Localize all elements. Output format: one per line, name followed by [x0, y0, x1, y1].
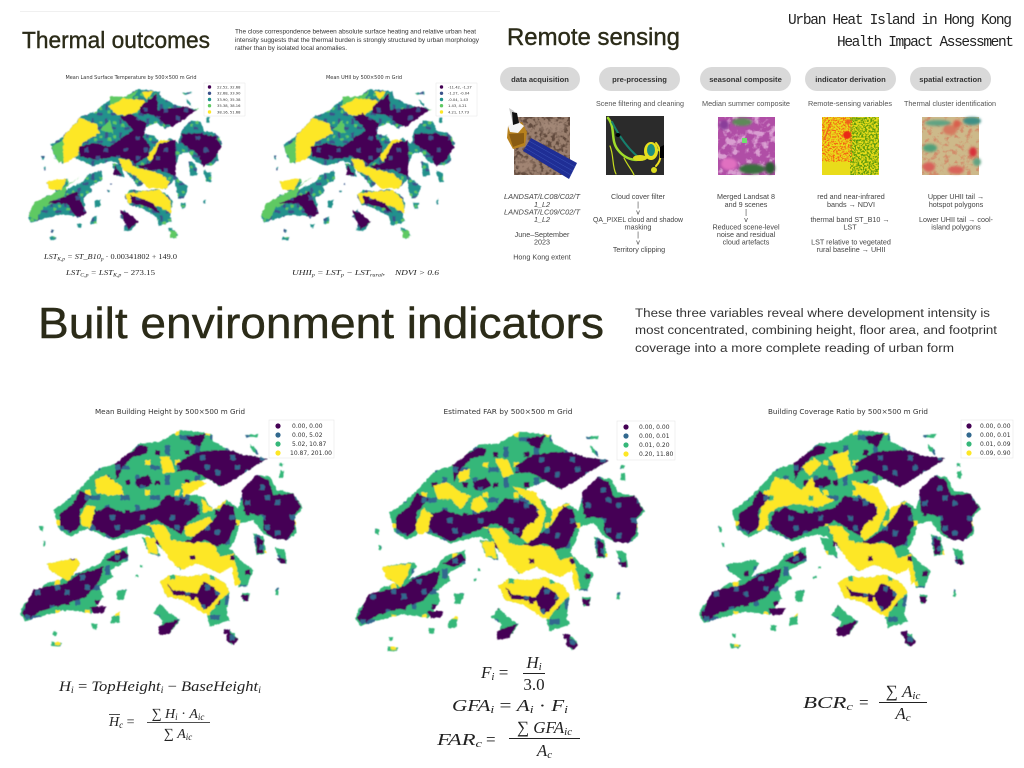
panel: seasonal composite — [700, 67, 791, 246]
body text: 1_L2 — [534, 215, 550, 224]
legend: 22.52, 32.68 — [217, 85, 241, 89]
body text — [919, 192, 994, 232]
body text: red and near-infrared — [817, 192, 885, 201]
legend: 0.00, 0.00 — [639, 424, 670, 431]
heading: Built environment indicators: Built environment indicators — [38, 299, 604, 348]
title: Urban Heat Island in Hong Kong: Health Impact Assessment — [837, 35, 1014, 51]
title: Urban Heat Island in Hong Kong: Urban Heat Island in Hong Kong — [788, 13, 1012, 29]
legend — [269, 420, 334, 458]
panel: data acquisition — [500, 67, 581, 262]
equations: floor area ratio — [436, 653, 580, 761]
legend: 0.00, 5.02 — [292, 432, 323, 439]
equations: floor area ratio: i — [539, 661, 542, 673]
equation: UHII: − LST — [344, 268, 371, 277]
legend — [961, 420, 1013, 458]
legend: 1.43, 4.21 — [448, 104, 467, 108]
text block: built environment description: most concentrated, combining height, floor area, and footprint — [635, 323, 998, 337]
body text: bands → NDVI — [827, 200, 875, 209]
equation: building coverage ratio: A — [895, 704, 906, 723]
body text: rural baseline → UHII — [817, 245, 885, 254]
legend: 0.01, 0.20 — [639, 442, 670, 449]
equations: floor area ratio: i — [490, 704, 494, 716]
body text: island polygons — [931, 222, 981, 232]
top divider line — [20, 11, 500, 12]
equations: mean building height: ic — [186, 732, 192, 742]
map title: Mean UHII by 500×500 m Grid — [326, 75, 402, 81]
equations: mean building height: · — [178, 707, 189, 722]
equations: floor area ratio: A — [537, 741, 547, 760]
equation: building coverage ratio: ∑ A — [886, 682, 912, 701]
text block: thermal description — [235, 28, 480, 52]
equation: UHII: = LST — [315, 268, 342, 277]
legend: 35.38, 38.16 — [217, 104, 241, 108]
subheading: Thermal cluster identification — [904, 101, 996, 108]
equations: floor area ratio: = — [494, 696, 517, 715]
legend: 0.09, 0.90 — [980, 450, 1011, 457]
body text: 1_L2 — [534, 200, 550, 209]
equations: mean building height: H — [59, 679, 69, 695]
map: Mean UHII — [261, 75, 477, 240]
equations: mean building height: − — [163, 679, 181, 695]
equations: mean building height: i — [258, 685, 262, 695]
equations: mean building height: = — [123, 715, 135, 730]
equations: LST: LST — [44, 252, 56, 261]
body text: Cloud cover filter — [611, 192, 666, 201]
equations: LST: K,p — [112, 274, 122, 278]
body text — [504, 192, 581, 262]
equation: UHII: p — [310, 274, 315, 278]
legend: -11.42, -1.27 — [448, 85, 472, 89]
equation: building coverage ratio: BCR — [803, 693, 835, 712]
legend: 33.90, 35.38 — [217, 98, 241, 102]
equation: building coverage ratio: c — [906, 712, 911, 724]
text block: built environment description: These three variables reveal where development intensity is — [635, 306, 990, 320]
map title: Mean Building Height by 500×500 m Grid — [95, 407, 245, 416]
legend: 0.20, 11.80 — [639, 451, 674, 458]
map title: Estimated FAR by 500×500 m Grid — [444, 407, 572, 416]
equations: floor area ratio: A — [517, 696, 527, 715]
icon: satellite over terrain — [507, 108, 577, 179]
pill label — [700, 67, 791, 91]
equations: floor area ratio: ic — [564, 726, 572, 738]
choropleth — [355, 432, 645, 652]
pill label: pre-processing — [612, 75, 667, 84]
equations: mean building height — [58, 679, 262, 742]
equations: mean building height: i — [175, 712, 178, 722]
equation: building coverage ratio: c — [846, 701, 853, 713]
equations: LST: − 273.15 — [121, 268, 155, 277]
equations: mean building height: TopHeight — [91, 679, 152, 695]
legend — [436, 83, 477, 116]
equations: LST: = LST — [88, 268, 114, 277]
equation: UHII: , — [383, 268, 385, 277]
legend: 0.01, 0.09 — [980, 441, 1011, 448]
body text: Reduced scene-level — [712, 222, 780, 232]
equation: UHII: p — [340, 274, 345, 278]
panel: pre-processing — [593, 67, 684, 254]
equation: UHII: NDVI > 0.6 — [394, 268, 439, 277]
choropleth — [20, 430, 303, 647]
equations: mean building height: ic — [198, 712, 204, 722]
equations: floor area ratio: i — [491, 671, 494, 683]
equations: mean building height: i — [71, 685, 74, 695]
body text: Territory clipping — [613, 245, 665, 254]
text block: thermal description: The close correspondence between absolute surface heating and relative urban heat — [235, 28, 476, 36]
body text: noise and residual — [717, 230, 776, 239]
equations: floor area ratio: FAR — [437, 730, 466, 749]
equations: LST: p — [100, 258, 104, 262]
body text — [810, 192, 891, 254]
map title: Building Coverage Ratio by 500×500 m Grid — [768, 407, 928, 416]
body text: Merged Landsat 8 — [717, 192, 775, 201]
equations: LST — [43, 252, 177, 278]
legend: 38.16, 51.68 — [217, 110, 241, 114]
choropleth — [261, 89, 455, 240]
equation: UHII: rural — [370, 274, 383, 278]
body text: Hong Kong extent — [513, 252, 571, 262]
body text: Lower UHII tail → cool- — [919, 215, 994, 224]
subheading: Median summer composite — [702, 101, 790, 108]
pill label: data acquisition — [511, 75, 569, 84]
body text: v — [636, 238, 640, 246]
equations: mean building height: A — [189, 707, 198, 722]
equations: LST: K,p — [56, 258, 66, 262]
equations: LST: = ST_B10 — [65, 252, 101, 261]
body text: 2023 — [534, 238, 550, 246]
image: cluster overlay — [922, 117, 981, 175]
equations: floor area ratio: H — [526, 653, 539, 672]
equations: mean building height: ∑ H — [152, 707, 175, 722]
body text: thermal band ST_B10 → — [810, 215, 890, 224]
equations: floor area ratio: GFA — [452, 696, 483, 715]
legend: 0.00, 0.01 — [980, 432, 1011, 439]
pill label — [910, 67, 991, 91]
legend — [204, 83, 245, 116]
equations: mean building height: H — [109, 715, 119, 730]
subheading: Remote-sensing variables — [808, 101, 893, 108]
title: Urban Heat Island in Hong Kong — [788, 13, 1014, 51]
body text: | — [637, 230, 639, 239]
equations: floor area ratio: c — [476, 738, 482, 750]
body text: v — [744, 215, 748, 224]
equations: LST: C,p — [80, 274, 89, 278]
panel: spatial extraction — [904, 67, 996, 232]
legend: -0.04, 1.43 — [448, 98, 469, 102]
pill label — [805, 67, 896, 91]
equations: mean building height: BaseHeight — [181, 679, 249, 695]
map: Mean Building Height — [20, 407, 334, 647]
legend: -1.27, -0.04 — [448, 92, 470, 96]
pill label — [500, 67, 580, 91]
text block: built environment description: coverage into a more complete reading of urban form — [635, 341, 954, 355]
legend: 10.87, 201.00 — [290, 450, 332, 457]
equations: mean building height: c — [119, 720, 123, 730]
map: Estimated FAR — [355, 407, 675, 652]
text block: built environment description — [635, 306, 998, 355]
body text — [712, 192, 780, 246]
image: median composite — [718, 117, 775, 175]
map: Mean Land Surface Temperature — [28, 75, 245, 240]
legend: 0.00, 0.01 — [639, 433, 670, 440]
equations: mean building height: ∑ A — [164, 727, 186, 742]
equations: floor area ratio: = — [486, 730, 496, 749]
equations: floor area ratio: F — [551, 696, 562, 715]
legend: 32.68, 33.90 — [217, 92, 241, 96]
equation: UHII: UHII — [292, 268, 308, 277]
pill label: spatial extraction — [919, 75, 982, 84]
image: derived indicators — [822, 117, 879, 175]
body text: v — [636, 208, 640, 216]
text block: thermal description: intensity suggests that the thermal burden is strongly structured by urban morphology — [235, 37, 480, 44]
image: filtered scene — [606, 116, 664, 175]
body text: Upper UHII tail → — [928, 192, 984, 201]
equations: floor area ratio: F — [481, 663, 491, 682]
equations: floor area ratio: c — [547, 749, 552, 761]
text block: thermal description: rather than by isolated local anomalies. — [235, 45, 347, 52]
equation: UHII — [292, 268, 439, 278]
equations: LST: · 0.00341802 + 149.0 — [104, 252, 177, 261]
equations: floor area ratio: ∑ GFA — [517, 718, 564, 737]
choropleth — [28, 89, 223, 240]
equation: building coverage ratio: ic — [912, 690, 920, 702]
equations: mean building height: = — [74, 679, 91, 695]
body text: masking — [625, 222, 651, 232]
map title: Mean Land Surface Temperature by 500×500 m Grid — [66, 75, 196, 81]
equation: building coverage ratio: = — [859, 693, 869, 712]
legend: 0.00, 0.00 — [980, 423, 1011, 430]
panel: indicator derivation — [805, 67, 896, 254]
body text: June–September — [515, 230, 570, 239]
legend: 0.00, 0.00 — [292, 423, 323, 430]
equations: floor area ratio: 3.0 — [523, 675, 545, 694]
subheading: Scene filtering and cleaning — [596, 101, 684, 108]
pill label: indicator derivation — [815, 75, 886, 84]
body text: | — [745, 208, 747, 216]
body text: cloud artefacts — [723, 238, 770, 246]
legend: 5.02, 10.87 — [292, 441, 327, 448]
equations: LST: LST — [66, 268, 78, 277]
body text — [593, 192, 684, 254]
equation: building coverage ratio — [803, 682, 927, 724]
legend: 4.21, 17.73 — [448, 110, 470, 114]
equations: floor area ratio: i — [530, 704, 534, 716]
heading: Thermal outcomes: Thermal outcomes — [22, 27, 210, 53]
equations: floor area ratio: = — [494, 663, 508, 682]
body text: LST relative to vegetated — [811, 238, 891, 246]
body text: hotspot polygons — [929, 200, 984, 209]
body text: and 9 scenes — [725, 200, 768, 209]
body text: LANDSAT/LC09/C02/T — [504, 208, 581, 216]
choropleth — [699, 430, 981, 648]
heading: Remote sensing: Remote sensing — [507, 24, 680, 51]
equations: floor area ratio: · — [534, 696, 551, 715]
body text: LST — [843, 222, 857, 232]
map: Building Coverage Ratio — [699, 407, 1013, 648]
body text: QA_PIXEL cloud and shadow — [593, 215, 684, 224]
equations: mean building height: i — [161, 685, 164, 695]
body text: | — [637, 200, 639, 209]
body text: LANDSAT/LC08/C02/T — [504, 192, 581, 201]
equations: floor area ratio: i — [564, 704, 568, 716]
pill label — [599, 67, 680, 91]
legend — [617, 421, 675, 460]
pill label: seasonal composite — [709, 75, 782, 84]
